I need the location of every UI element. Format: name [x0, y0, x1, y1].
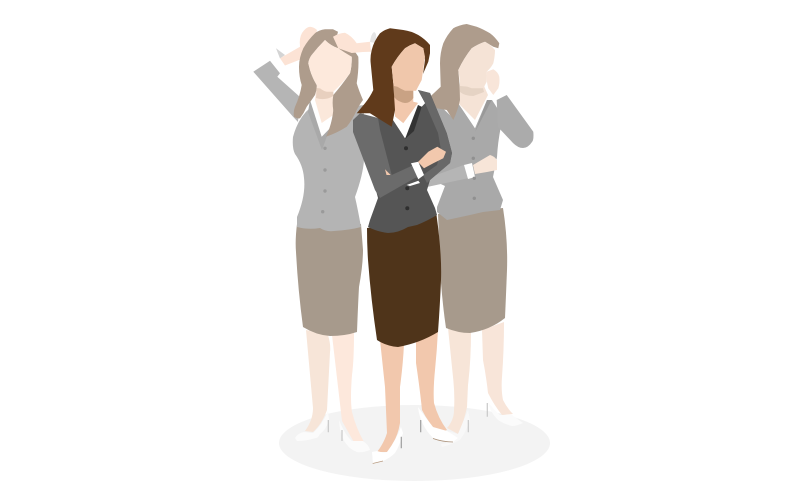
left woman collar and neck [308, 85, 336, 150]
centre woman jacket body [360, 90, 452, 233]
right woman hand at cheek [487, 69, 500, 95]
left woman shoes [295, 411, 370, 452]
right woman shoes [441, 402, 523, 447]
left woman jacket [293, 105, 364, 231]
right woman buttons [472, 137, 476, 200]
left woman buttons [321, 147, 327, 213]
right woman face [458, 42, 495, 88]
right woman raised sleeve [497, 95, 533, 148]
left woman legs [305, 330, 364, 444]
left woman face [308, 40, 352, 92]
centre woman buttons [404, 146, 409, 210]
floor shadow [279, 405, 550, 481]
centre woman shirt and collar [393, 91, 425, 138]
left woman hair [294, 29, 363, 137]
figure: centre woman, arms crossed [353, 28, 458, 464]
centre woman face [392, 43, 425, 91]
centre woman skirt [367, 215, 441, 347]
centre woman hands [385, 147, 446, 175]
centre woman legs [377, 330, 447, 452]
right woman legs [447, 322, 513, 434]
centre woman shoes [372, 407, 458, 464]
right woman hair [430, 24, 499, 120]
right woman neck and collar [458, 82, 492, 132]
centre woman neck [393, 83, 420, 123]
left woman raised arm [253, 61, 300, 122]
centre woman far sleeve [418, 90, 452, 183]
left woman skirt [296, 224, 363, 336]
centre woman dark lapel [405, 105, 422, 139]
left woman hand over hair and far sleeve [333, 32, 376, 53]
right woman skirt [438, 208, 507, 333]
centre woman near sleeve [353, 113, 424, 198]
figure: left woman, hands on head [253, 27, 376, 452]
right woman jacket [420, 98, 503, 220]
figure: right woman, hand at face [420, 24, 533, 447]
right woman forearm, cuff and hand [427, 155, 497, 187]
centre woman neck shadow [394, 86, 413, 103]
centre woman hair [357, 28, 430, 127]
centre woman cuffs [407, 162, 424, 186]
left woman forearm, cuff and hand [276, 27, 317, 66]
